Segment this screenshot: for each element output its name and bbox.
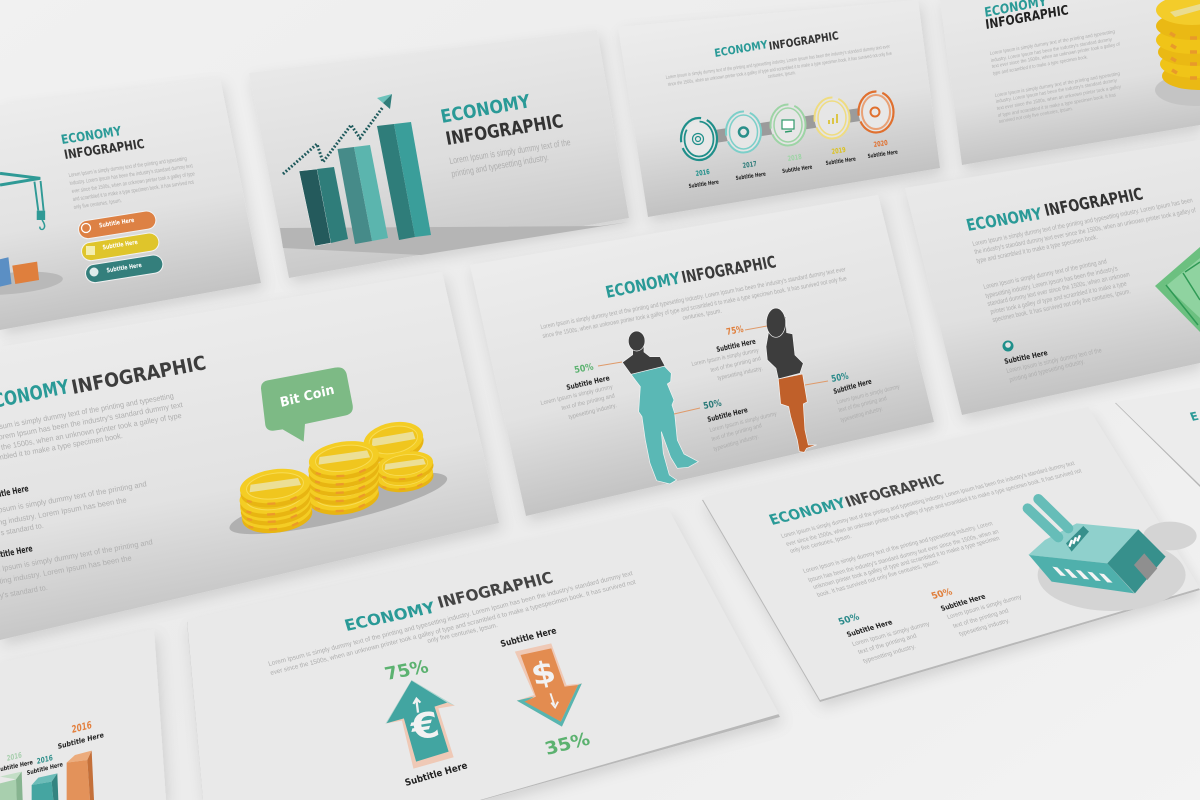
text block: book. It has survived not only five centuries, Ipsum. — [816, 558, 941, 599]
callout: 50% left: text of the printing and — [561, 392, 616, 412]
arrow: down dollar: $ — [527, 654, 559, 693]
text block: Lorem Ipsum is simply dummy text of the printing and — [983, 258, 1108, 291]
text block: Lorem Ipsum is simply dummy text of the printing and typesetting industry. Lorem Ipsum has been the industry's standard dummy text ever — [665, 44, 891, 81]
text block — [989, 29, 1122, 125]
labels: Subtitle Here — [27, 761, 63, 777]
callout: 75%: 75% — [725, 324, 745, 338]
icon: gold coin stacks — [225, 417, 451, 546]
labels: Subtitle Here — [782, 165, 813, 175]
callout: 50% centre: typesetting industry. — [713, 433, 760, 453]
text block: type and scrambled it to make a type specimen book. — [976, 234, 1099, 265]
text block — [665, 44, 892, 88]
panel: silhouettes slide — [470, 195, 934, 516]
labels: Subtitle Here — [735, 172, 766, 182]
panel: coin stack slide top right — [940, 0, 1200, 165]
labels — [688, 138, 898, 190]
text block: industry. Lorem Ipsum has been the industry's standard dummy text — [69, 163, 194, 187]
label: subtitle upper: Subtitle Here — [499, 626, 558, 650]
title: INFOGRAPHIC — [69, 351, 208, 399]
title: INFOGRAPHIC — [1042, 184, 1145, 220]
icon: 2020 target ring — [858, 92, 894, 132]
text block: only five centuries, Ipsum. — [73, 198, 123, 211]
arrow: up euro — [386, 680, 455, 769]
label: 75%: 75% — [383, 657, 431, 685]
title: INFOGRAPHIC — [985, 3, 1070, 33]
text block: specimen book. It has survived not only five centuries, Ipsum. — [992, 288, 1132, 324]
text block: typesetting industry. Lorem Ipsum has been the industry's — [985, 265, 1119, 300]
icon: crane — [0, 173, 45, 229]
callout: 50% orange: typesetting industry. — [958, 617, 1011, 638]
text block: ever since the 1500s, when an unknown printer took a galley of type and scrambled it to make a typespecimen book. It has survived not — [270, 579, 637, 677]
labels: 2017 — [742, 159, 757, 170]
icon: woman silhouette — [766, 308, 817, 452]
title: ECONOMY — [714, 38, 769, 60]
text block: Lorem Ipsum is simply dummy text of the printing and typesetting industry. Lorem — [802, 520, 994, 575]
callout: 50% right: Subtitle Here — [833, 377, 873, 396]
callout: 50% teal: typesetting industry. — [862, 643, 917, 665]
callout: 50% left: typesetting industry. — [568, 402, 618, 421]
labels: 2016 — [36, 753, 53, 766]
title — [714, 29, 839, 60]
arrow: dotted trend — [283, 94, 392, 174]
title: INFOGRAPHIC — [768, 29, 839, 53]
panel: factory slide — [702, 407, 1200, 702]
title: ECONOMY — [342, 598, 438, 635]
text block: ever since the 1500s, when an unknown printer took a galley of type — [71, 171, 195, 195]
callout: 50% orange: text of the printing and — [952, 607, 1010, 630]
labels: Subtitle Here — [825, 157, 856, 167]
labels: 2016 — [71, 720, 92, 736]
icon: 2017 gear ring — [726, 112, 761, 152]
panel: corner slide — [1115, 388, 1200, 487]
text block: printer took a galley of type and scrambled it to make a type — [990, 281, 1128, 316]
title: INFOGRAPHIC — [444, 111, 565, 150]
callout: 50% centre: Lorem Ipsum is simply dummy — [709, 410, 778, 434]
icon: coin stack — [1155, 0, 1200, 106]
title — [604, 252, 778, 302]
icon: man silhouette — [622, 331, 698, 484]
title: ECONOMY — [60, 123, 123, 147]
text block: and scrambled it to make a type specimen book. It has survived not — [72, 180, 195, 203]
callout: 50% teal: text of the printing and — [857, 632, 918, 656]
labels: 2019 — [831, 145, 846, 156]
icon: 2016 target ring — [681, 118, 717, 160]
labels: 2018 — [787, 152, 802, 163]
orange pill — [77, 210, 157, 240]
callout: 50% orange: Subtitle Here — [939, 593, 987, 613]
panel: crane slide top left — [0, 78, 261, 330]
panel: timeline slide — [618, 0, 940, 217]
icon: 2019 chart ring — [814, 98, 850, 138]
panel: bitcoin slide — [0, 272, 499, 640]
chart: 3D bars — [0, 751, 94, 800]
callout: 75%: Lorem Ipsum is simply dummy — [691, 347, 760, 368]
title: ECONOMY — [964, 204, 1044, 235]
title: INFOGRAPHIC — [843, 472, 947, 511]
title — [60, 123, 146, 162]
title: ECONOMY — [439, 91, 533, 128]
icon: factory — [1028, 499, 1197, 611]
icon: green banknotes — [1155, 247, 1200, 332]
text block: centuries, Ipsum. — [682, 308, 723, 322]
callout: 75%: text of the printing and — [710, 355, 762, 374]
callout: 50% centre: text of the printing and — [711, 422, 763, 443]
callout: 50% orange — [930, 587, 1024, 638]
text block: Lorem Ipsum is simply dummy text of the printing and typesetting industry. Lorem Ipsum has been the industry's standard dummy text — [780, 460, 1076, 540]
labels: 2016 — [6, 750, 22, 763]
text block: Lorem Ipsum is simply dummy text of the printing and typesetting industry. Lorem Ipsum has been the industry's standard dummy text ever — [540, 266, 847, 331]
title — [342, 569, 555, 635]
text block: unknown printer took a galley of type and scrambled it to make a type specimen — [812, 535, 1001, 591]
callout: 50% right: Lorem Ipsum is simply dummy — [836, 383, 901, 406]
callout: 75%: typesetting industry. — [717, 365, 764, 382]
title: ECONOMY — [604, 268, 682, 302]
labels: Subtitle Here — [57, 730, 104, 751]
callout: Bit Coin speech bubble: Bit Coin — [279, 383, 336, 411]
text block: centuries, Ipsum. — [767, 70, 796, 80]
panel: bar chart slide — [249, 30, 629, 278]
text block: only five centuries, Ipsum. — [789, 533, 853, 555]
text block — [68, 156, 195, 211]
subtitle and body: Subtitle Here — [1003, 348, 1049, 366]
arrow: down dollar — [515, 643, 582, 727]
title: INFOGRAPHIC — [680, 252, 778, 287]
callout: 50% teal: 50% — [837, 612, 861, 628]
text block: Lorem Ipsum is simply dummy text of the printing and typesetting — [994, 71, 1120, 99]
icon: 2018 monitor ring — [770, 104, 806, 146]
floor shadow — [280, 222, 629, 255]
subtitle and body: Lorem Ipsum is simply dummy text of the — [1006, 347, 1103, 375]
title — [439, 91, 565, 150]
labels: Subtitle Here — [867, 150, 898, 160]
title — [0, 351, 208, 415]
yellow pill: Subtitle Here — [102, 239, 138, 251]
text block: industry. Lorem Ipsum has been the industry's standard dummy — [995, 78, 1118, 105]
teal pill: Subtitle Here — [106, 262, 142, 274]
text block: Ipsum has been the industry's standard dummy text ever since the 1500s, when an — [807, 528, 1000, 584]
orange pill: Subtitle Here — [99, 217, 135, 229]
callout: 50% orange: Lorem Ipsum is simply dummy — [946, 593, 1024, 621]
callout: Bit Coin speech bubble — [261, 367, 353, 442]
callout: 50% left: Lorem Ipsum is simply dummy — [540, 383, 614, 407]
text block — [780, 460, 1083, 599]
callout: 50% centre — [674, 398, 778, 453]
text block: Lorem Ipsum is simply dummy text of the printing and typesetting — [68, 156, 187, 179]
subtitle block one — [0, 479, 147, 542]
labels — [0, 720, 104, 777]
text block: Lorem Ipsum is simply dummy text of the — [449, 137, 571, 166]
text block: since the 1500s, when an unknown printer took a galley of type and scrambled it to make a type specimen book. It has survived not only five — [542, 275, 848, 340]
callout: 75%: Subtitle Here — [715, 337, 757, 354]
icon: badge — [1002, 340, 1014, 352]
text block: industry. Lorem Ipsum has been the industry's standard dummy — [990, 37, 1113, 64]
callout: 50% right — [805, 371, 901, 424]
label: subtitle lower: Subtitle Here — [404, 760, 469, 789]
callout: 50% left: Subtitle Here — [565, 373, 611, 392]
text block: since the 1500s, when an unknown printer took a galley of type and scrambled it to make a type specimen book. It has survived not only five — [667, 51, 892, 88]
text block: text ever since the 1500s, when an unknown printer took a galley — [996, 84, 1122, 112]
chart: crane blocks and shadow — [0, 257, 64, 299]
text block: of type and scrambled it to make a type specimen book. It has — [997, 92, 1117, 119]
text block: text ever since the 1500s, when an unknown printer took a galley of — [991, 41, 1121, 70]
timeline connectors — [705, 113, 870, 138]
subtitle block two — [0, 537, 153, 604]
labels: 2016 — [695, 167, 710, 178]
title: ECONOMY — [767, 496, 849, 529]
callout: 50% teal: Subtitle Here — [845, 618, 894, 639]
callout: 50% orange: 50% — [930, 587, 954, 602]
text block — [0, 391, 184, 467]
title — [767, 472, 947, 529]
yellow pill — [80, 232, 160, 262]
panel: 3D bars slide bottom left — [0, 629, 166, 800]
panel: arrows slide — [187, 508, 780, 800]
chart: three bars — [299, 122, 431, 246]
callout: 50% teal — [837, 612, 932, 665]
labels: 2020 — [873, 138, 888, 149]
text block: Lorem Ipsum is simply dummy text of the printing and typesetting industry. Lorem Ipsum has been the industry's standard dummy text — [268, 570, 634, 668]
callout: 50% centre: 50% — [702, 398, 723, 412]
callout: 50% right: text of the printing and — [838, 395, 888, 414]
callout: 50% left: 50% — [573, 362, 595, 376]
callout: 75% — [691, 324, 767, 382]
title: INFOGRAPHIC — [63, 136, 146, 162]
title — [964, 184, 1145, 235]
callout: 50% left — [540, 362, 622, 421]
title: INFOGRAPHIC — [435, 569, 555, 612]
teal pill — [84, 254, 164, 284]
arrow: up euro: € — [406, 704, 443, 748]
text block: type and scrambled it to make a type specimen book. — [992, 54, 1088, 77]
labels: Subtitle Here — [688, 180, 719, 190]
panel: money slide right — [905, 140, 1200, 415]
callout: 50% right: typesetting industry. — [840, 405, 884, 424]
text block — [972, 197, 1197, 324]
text block: printing and typesetting industry. — [451, 152, 549, 179]
callout: 50% right: 50% — [830, 371, 850, 385]
text block: only five centuries, Ipsum. — [427, 622, 499, 645]
text block: standard dummy text ever since the 1500s, when an unknown — [987, 271, 1131, 308]
subtitle and body: printing and typesetting industry. — [1009, 358, 1086, 384]
text block: survived not only five centuries, Ipsum. — [998, 106, 1073, 125]
callout: 50% centre: Subtitle Here — [707, 405, 749, 424]
label: 35%: 35% — [543, 729, 593, 760]
callout: 50% teal: Lorem Ipsum is simply dummy — [851, 620, 932, 648]
text block: Lorem Ipsum is simply dummy text of the printing and typesetting — [989, 29, 1115, 57]
text block: ever since the 1500s, when an unknown printer took a galley of type and scrambled it to make a type specimen book. It has survived not — [785, 467, 1083, 548]
